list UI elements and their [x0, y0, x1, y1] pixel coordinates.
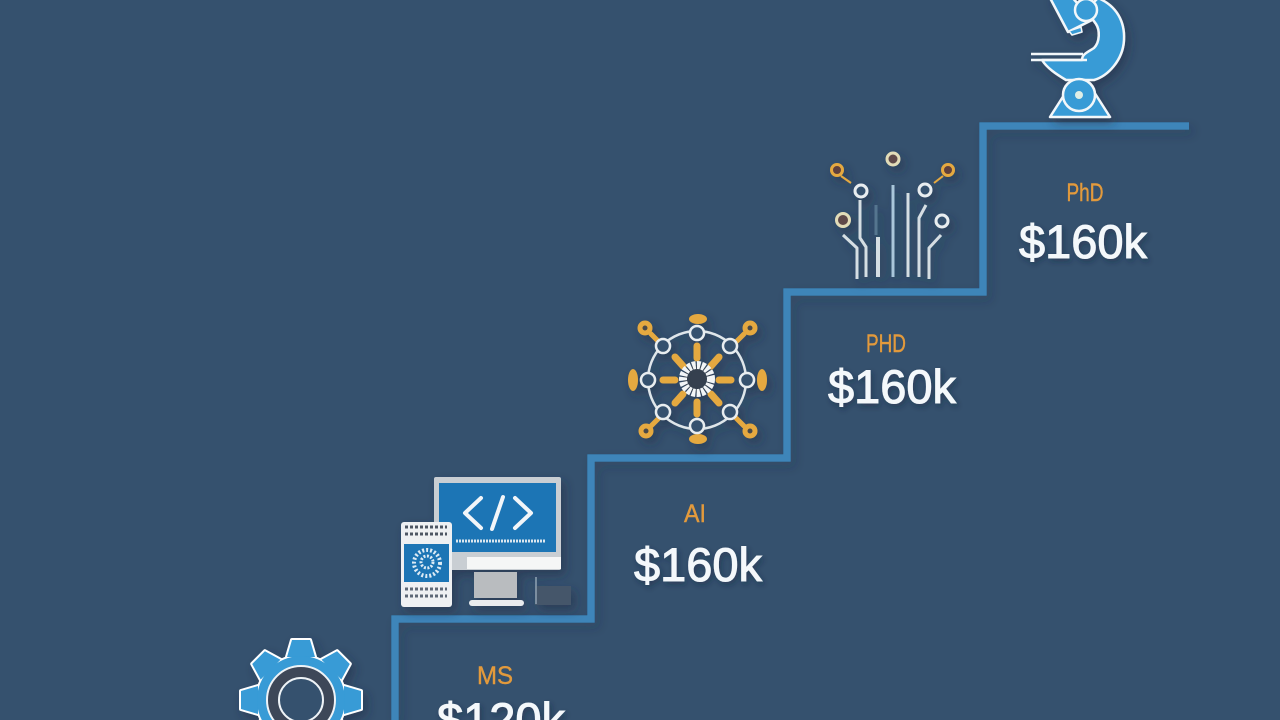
phone	[401, 522, 452, 607]
salary: PHD $160k: $160k	[828, 360, 957, 413]
gold nodes	[832, 164, 954, 176]
icon: microscope	[1031, 0, 1124, 117]
salary: AI $160k: $160k	[634, 538, 763, 591]
tube	[1049, 0, 1092, 32]
arm	[1042, 0, 1124, 80]
gold links	[841, 176, 943, 183]
icon: circuit traces	[832, 153, 954, 279]
base	[1050, 70, 1110, 117]
icon: gear	[241, 640, 361, 720]
salary: PhD $160k: $160k	[1019, 215, 1148, 268]
small device	[535, 577, 571, 605]
label: MS: MS	[477, 662, 513, 690]
base hub	[1063, 79, 1095, 111]
white ring nodes	[641, 326, 754, 433]
center gear	[683, 365, 711, 393]
outer links	[651, 334, 744, 426]
icon: computer and phone	[401, 477, 571, 607]
monitor	[434, 477, 561, 606]
label: AI: AI	[684, 500, 706, 528]
outer capsules	[628, 314, 767, 444]
gold spokes	[663, 346, 731, 414]
white nodes	[836, 153, 899, 226]
staircase line	[395, 126, 1189, 720]
outer ring nodes	[640, 323, 755, 436]
label: PhD: PhD	[1066, 179, 1104, 207]
icon: neural network wheel	[628, 314, 767, 444]
stage	[1031, 54, 1087, 60]
label: PHD: PHD	[866, 330, 906, 358]
